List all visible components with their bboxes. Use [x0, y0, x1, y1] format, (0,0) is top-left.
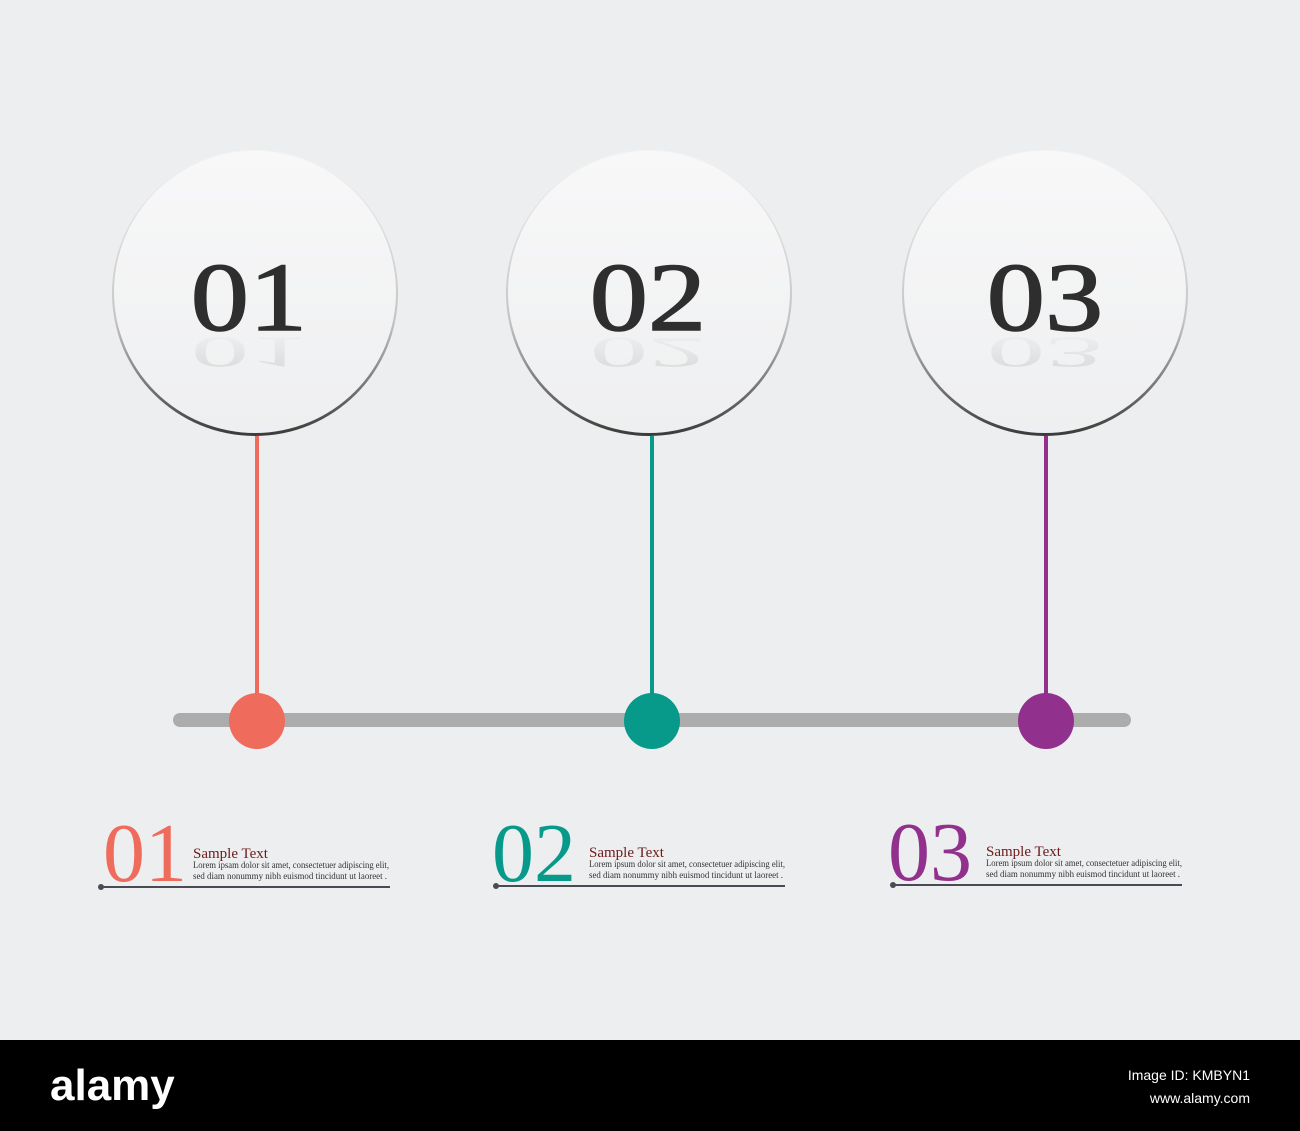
caption 3: Sample Text	[986, 844, 1062, 860]
circle 1: 01	[191, 245, 307, 352]
circle 3	[902, 150, 1188, 436]
circle 3: 03	[987, 328, 1103, 376]
caption 2	[492, 807, 785, 900]
step 2	[506, 150, 792, 749]
caption 1	[98, 807, 390, 900]
circle 1: 01	[191, 328, 307, 376]
circle 2: 02	[590, 245, 706, 352]
caption 3: 03	[888, 806, 972, 899]
footer bar	[0, 1040, 1300, 1131]
dot 3	[1018, 693, 1074, 749]
circle 3: 03	[987, 245, 1103, 352]
caption 3: sed diam nonummy nibh euismod tincidunt ut laoreet .	[986, 869, 1180, 879]
dot 2	[624, 693, 680, 749]
circle 1	[112, 150, 398, 436]
connector 1	[255, 436, 259, 720]
caption 2: Lorem ipsum dolor sit amet, consectetuer adipiscing elit,	[589, 859, 785, 869]
connector 2	[650, 436, 654, 720]
caption 1: 01	[103, 807, 187, 900]
timeline bar	[180, 713, 1124, 727]
caption 2: Sample Text	[589, 845, 665, 861]
caption 1: sed diam nonummy nibh euismod tincidunt ut laoreet .	[193, 871, 387, 881]
footer bar: Image ID: KMBYN1	[1128, 1067, 1250, 1083]
step 1	[112, 150, 398, 749]
caption 1: Lorem ipsam dolor sit amet, consectetuer adipiscing elit,	[193, 860, 389, 870]
step 3	[902, 150, 1188, 749]
connector 3	[1044, 436, 1048, 720]
footer bar: alamy	[50, 1061, 175, 1110]
circle 2: 02	[590, 328, 706, 376]
caption 3	[888, 806, 1182, 899]
caption 1: Sample Text	[193, 846, 269, 862]
circle 2	[506, 150, 792, 436]
caption 2: 02	[492, 807, 576, 900]
caption 2: sed diam nonummy nibh euismod tincidunt ut laoreet .	[589, 870, 783, 880]
caption 3: Lorem ipsum dolor sit amet, consectetuer adipiscing elit,	[986, 858, 1182, 868]
footer bar: www.alamy.com	[1149, 1090, 1250, 1106]
dot 1	[229, 693, 285, 749]
